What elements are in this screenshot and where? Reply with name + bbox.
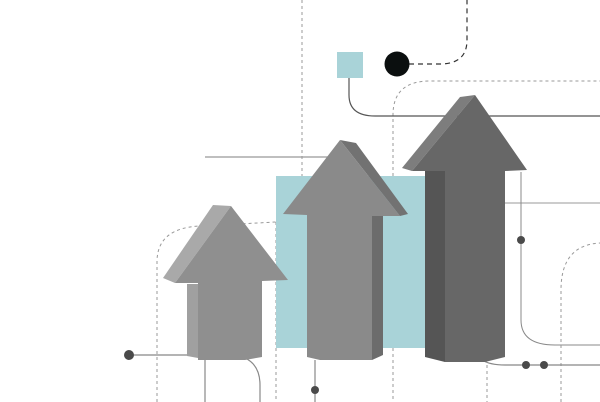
- arrow 3: [402, 95, 527, 362]
- dots: [124, 236, 548, 394]
- arrow 1: [163, 205, 288, 360]
- black dot: [384, 52, 410, 76]
- blue panel: [276, 176, 426, 348]
- background lines: [129, 0, 600, 402]
- small blue square: [337, 52, 363, 78]
- arrow 2: [283, 140, 408, 360]
